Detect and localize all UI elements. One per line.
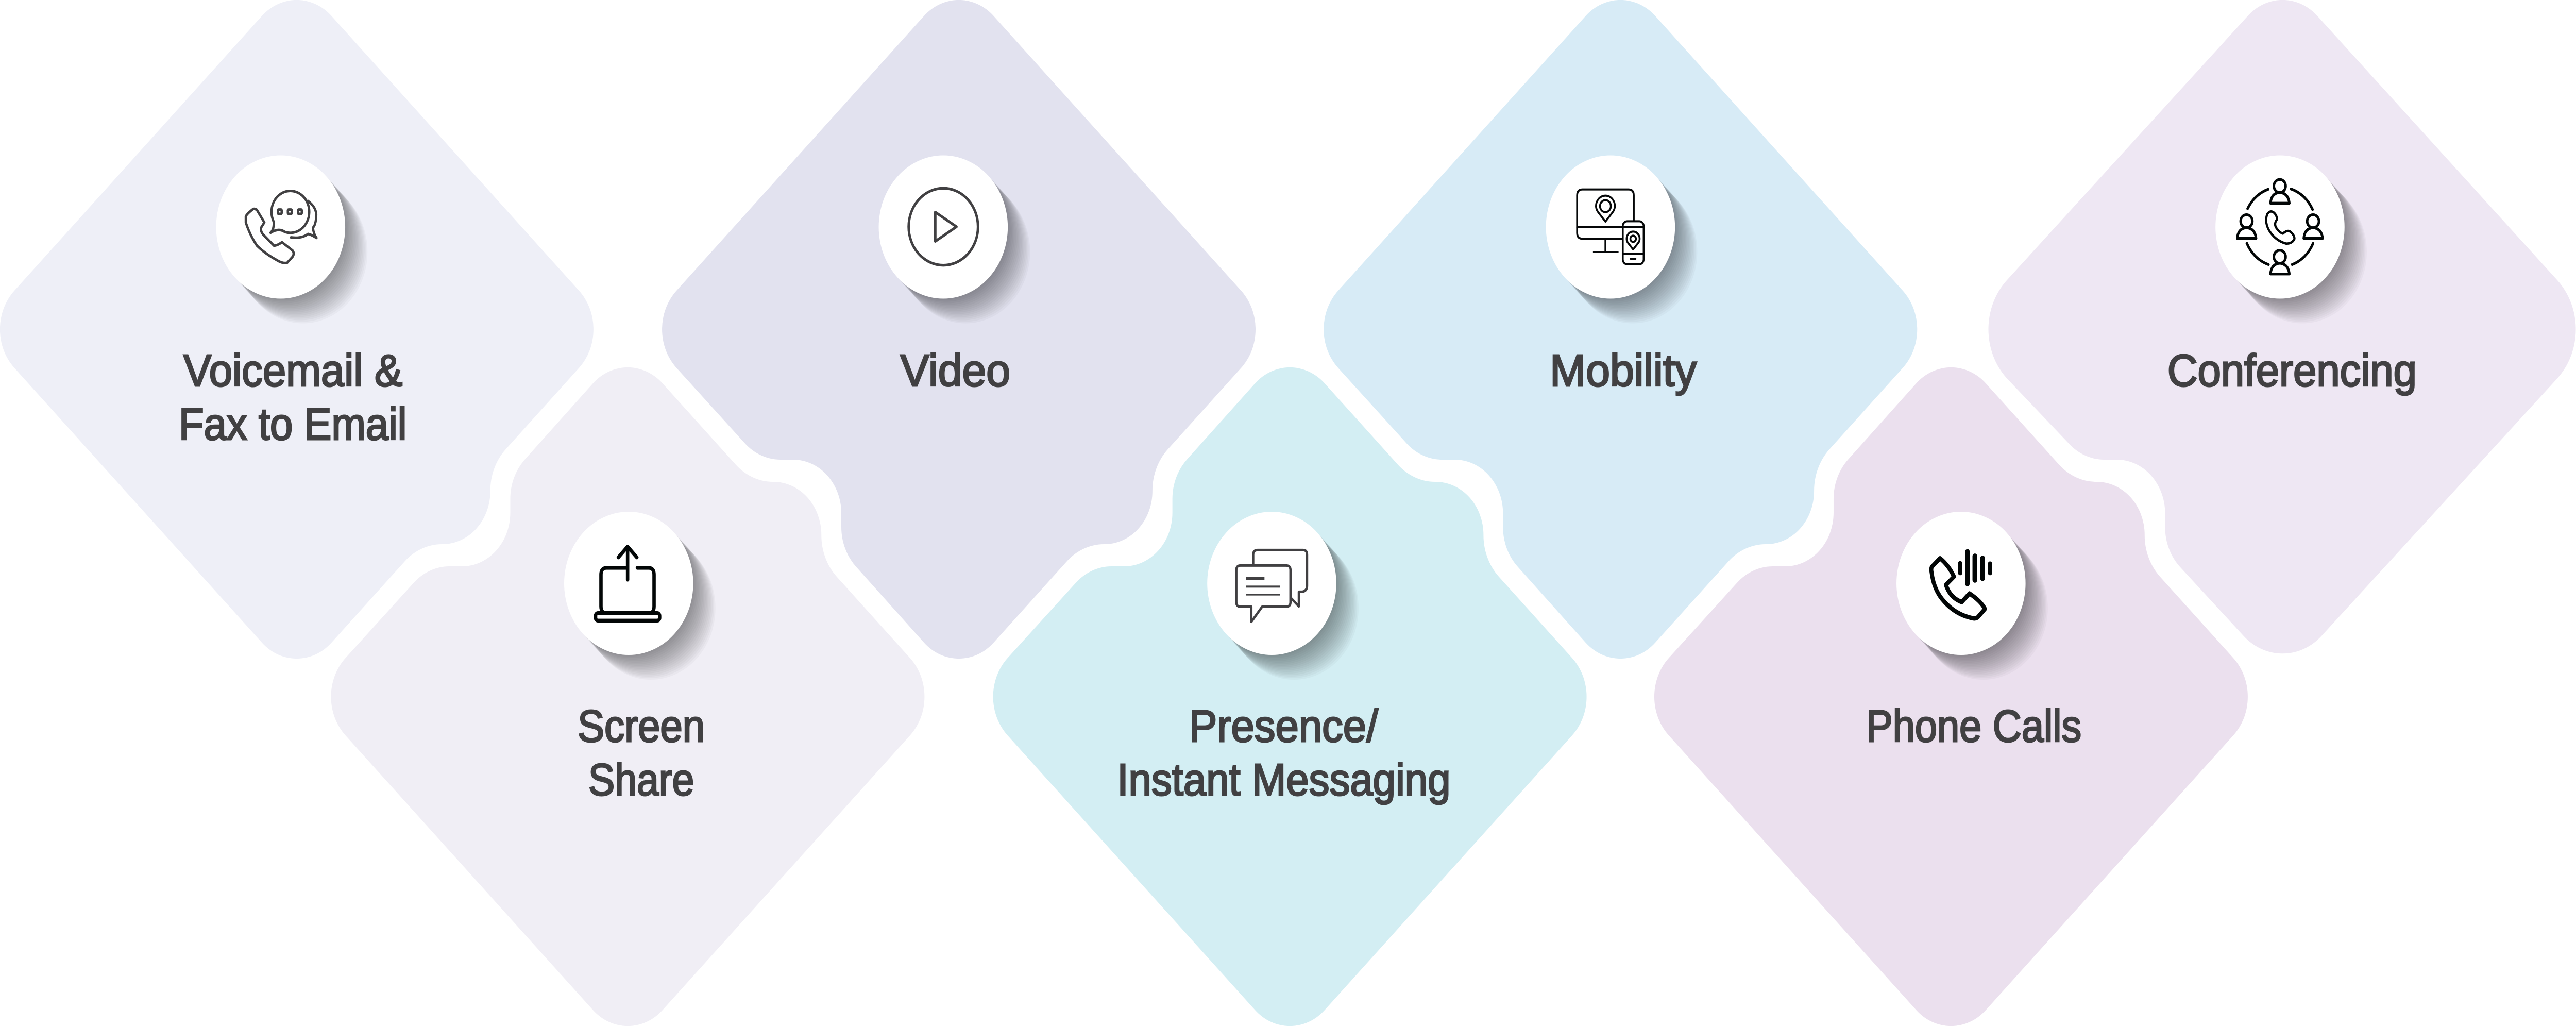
panel: Voicemail & Fax to Email [0, 0, 594, 659]
diamond background [0, 0, 594, 659]
icon badge shadow [1547, 157, 1697, 324]
diamond background [1654, 367, 2248, 1026]
icon badge shadow [1209, 513, 1359, 680]
icon badge circle [2215, 156, 2345, 299]
icon badge circle [879, 156, 1008, 299]
icon badge shadow [880, 157, 1030, 324]
label text: Video [900, 345, 1010, 396]
label text: Instant Messaging [1117, 754, 1450, 805]
icon badge shadow [217, 157, 367, 324]
icon: monitor and phone with location pins [1577, 190, 1643, 264]
panel: Phone Calls [1654, 367, 2248, 1026]
icon badge circle [564, 512, 693, 655]
panel: Screen Share [331, 367, 924, 1026]
label text [578, 701, 705, 805]
panel: Video [662, 0, 1256, 659]
panel: Conferencing [1989, 0, 2576, 653]
icon badge shadow [1898, 513, 2048, 680]
label text: Fax to Email [179, 399, 406, 449]
icon badge circle [1546, 156, 1675, 299]
icon: laptop with upload arrow [596, 547, 659, 620]
label text: Conferencing [2167, 345, 2417, 396]
panel: Mobility [1324, 0, 1917, 659]
label text: Mobility [1550, 345, 1697, 396]
label text: Voicemail & [183, 345, 402, 396]
icon: two speech bubbles [1236, 550, 1307, 622]
label text: Presence/ [1189, 701, 1378, 751]
label text [179, 345, 406, 449]
diamond background [1324, 0, 1917, 659]
diamond background [993, 367, 1587, 1026]
icon: play button [909, 188, 978, 265]
label text: Phone Calls [1866, 701, 2081, 751]
label text: Screen [578, 701, 705, 751]
icon badge circle [1896, 512, 2026, 655]
icon badge circle [216, 156, 345, 299]
label text [1117, 701, 1450, 805]
diamond background [331, 367, 924, 1026]
icon: phone with chat bubbles [246, 191, 316, 263]
icon badge circle [1207, 512, 1336, 655]
panel: Presence / Instant Messaging [993, 367, 1587, 1026]
diamond background [662, 0, 1256, 659]
icon badge shadow [2217, 157, 2367, 324]
label text: Share [588, 754, 694, 805]
icon: phone with sound bars [1931, 551, 1990, 618]
icon: conference call with four people [2237, 179, 2323, 274]
diamond background [1989, 0, 2576, 653]
icon badge shadow [566, 513, 716, 680]
